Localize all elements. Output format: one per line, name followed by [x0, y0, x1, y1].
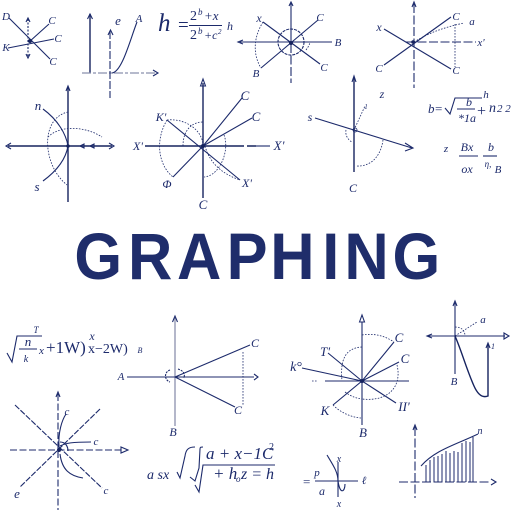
formula: root expression: n [25, 334, 31, 349]
title: GRAPHING [74, 219, 440, 293]
formula: root expression: x [88, 329, 95, 343]
chart: four-line axis top left: C [54, 33, 62, 45]
formula: h equals fraction [158, 7, 233, 43]
chart: dashed axes with dotted triangle top right: x' [476, 37, 485, 49]
chart: axis with n and s curve [6, 86, 114, 202]
formula: b equals root: = [435, 101, 442, 116]
formula: integral expression: o [236, 474, 241, 484]
chart: tilted axis with arrow: C [349, 181, 358, 195]
formula: root expression: x [38, 345, 44, 357]
chart: axis with dipping curve: a [480, 314, 486, 326]
chart: radial lines with arcs: C [199, 197, 208, 212]
chart: radial lines A B [290, 315, 410, 440]
formula: h equals fraction: h [227, 19, 233, 33]
formula: h equals fraction: 2 [190, 28, 197, 43]
chart: radial lines A B: K [320, 403, 331, 418]
chart: axis with n and s curve: s [34, 179, 40, 194]
formula: z with fractions [443, 140, 502, 176]
chart: axis with n and s curve: n [35, 98, 41, 113]
formula: h equals fraction: +x [204, 8, 219, 23]
formula: h equals fraction: = [178, 15, 189, 36]
formula: b equals root: *1a [458, 111, 476, 125]
formula: h equals fraction: h [158, 10, 170, 37]
chart: dashed axes with dotted triangle top right [375, 2, 485, 88]
formula: small fraction with crossing curve: p [313, 467, 320, 479]
formula: b equals root: n [489, 101, 496, 116]
chart: tilted axis with arrow: s [308, 110, 313, 124]
formula: root expression: k [24, 354, 29, 365]
formula: h equals fraction: 2 [218, 28, 222, 36]
chart: radial lines A B: B [359, 425, 367, 440]
chart: axis with dipping curve: 1 [491, 342, 495, 351]
formula: z with fractions: b [488, 140, 494, 154]
chart: area under curve bars [399, 425, 496, 498]
formula: root expression: B [138, 346, 143, 355]
chart: dashed axes with dotted triangle top right: C [452, 65, 460, 77]
chart: A B axis with wedge: A [117, 371, 125, 383]
chart: rising curve with axes [82, 13, 158, 98]
formula: root expression: +1W) [46, 338, 86, 357]
formula: b equals root [428, 89, 511, 125]
formula: b equals root: b [428, 101, 435, 116]
chart: radial lines with arcs: X' [241, 176, 252, 190]
chart: four-line axis top left: C [49, 56, 57, 68]
formula: h equals fraction: 2 [190, 9, 197, 24]
chart: four-line axis top left: C [48, 15, 56, 27]
chart: radial lines A B: T' [320, 344, 330, 359]
formula: z with fractions: η, [485, 159, 491, 169]
formula: small fraction with crossing curve: x [336, 454, 342, 465]
chart: axis with centre circle top middle: B [253, 68, 260, 80]
chart: dashed star with curves: c [104, 485, 109, 497]
chart: axis with dipping curve: B [451, 376, 458, 388]
chart: four-line axis top left: D [1, 11, 10, 23]
chart: axis with centre circle top middle [238, 2, 342, 83]
formula: small fraction with crossing curve: x [336, 499, 342, 510]
chart: radial lines A B: II' [397, 399, 410, 414]
formula: z with fractions: B [495, 164, 502, 176]
chart: A B axis with wedge [117, 316, 260, 439]
chart: dashed star with curves: e [14, 486, 20, 501]
chart: axis with centre circle top middle: C [320, 62, 328, 74]
formula: small fraction with crossing curve: = [303, 474, 310, 489]
chart: dashed axes with dotted triangle top right: a [469, 16, 475, 28]
formula: small fraction with crossing curve [303, 454, 367, 510]
formula: root expression: x−2W) [88, 342, 128, 357]
chart: dashed star with curves: c [65, 406, 70, 418]
formula: small fraction with crossing curve: ℓ [362, 475, 367, 487]
chart: radial lines with arcs: X' [273, 138, 285, 153]
chart: A B axis with wedge: C [234, 403, 243, 417]
chart: A B axis with wedge: B [169, 425, 177, 439]
chart: radial lines A B: C [401, 351, 410, 366]
chart: axis with dipping curve [427, 301, 509, 397]
formula: b equals root: 2 2 [497, 103, 511, 115]
chart: tilted axis with arrow [308, 76, 413, 195]
formula: integral expression: a + x−1C [206, 444, 274, 463]
formula: integral expression: z = h [240, 466, 274, 483]
chart: radial lines with arcs: K' [155, 110, 167, 124]
formula: integral expression: a sx [147, 468, 170, 483]
chart: radial lines A B: k° [290, 360, 302, 375]
chart: dashed axes with dotted triangle top right: C [452, 11, 460, 23]
chart: tilted axis with arrow: 1 [364, 103, 368, 111]
chart: radial lines with arcs [132, 79, 285, 212]
chart: dashed star with curves: c [94, 436, 99, 448]
chart: tilted axis with arrow: z [379, 87, 385, 101]
chart: radial lines with arcs: C [241, 88, 250, 103]
chart: rising curve with axes: e [115, 13, 121, 28]
chart: axis with centre circle top middle: B [335, 37, 342, 49]
formula: h equals fraction: b [198, 26, 203, 36]
formula: integral expression: 2 [269, 442, 274, 453]
formula: h equals fraction: +c [204, 28, 218, 42]
formula: b equals root: + [477, 103, 486, 120]
formula: root expression: T [33, 325, 39, 335]
formula: z with fractions: Bx [461, 140, 474, 154]
formula: z with fractions: z [443, 143, 449, 155]
formula: integral expression: + h [213, 464, 237, 483]
formula: z with fractions: ox [461, 162, 473, 176]
chart: radial lines with arcs: X' [132, 139, 143, 153]
chart: four-line axis top left [1, 11, 62, 68]
chart: area under curve bars: n [478, 426, 482, 437]
chart: dashed star with curves [10, 392, 128, 510]
formula: h equals fraction: b [198, 7, 203, 17]
formula: integral expression [147, 442, 275, 492]
chart: radial lines with arcs: C [252, 109, 261, 124]
chart: axis with centre circle top middle: x [255, 11, 262, 25]
chart: radial lines with arcs: Φ [162, 177, 172, 191]
chart: rising curve with axes: A [135, 13, 143, 25]
formula: small fraction with crossing curve: a [319, 484, 325, 498]
chart: dashed axes with dotted triangle top right: x [375, 20, 382, 34]
chart: radial lines A B: C [395, 330, 404, 345]
chart: axis with centre circle top middle: C [316, 12, 324, 24]
chart: four-line axis top left: K [1, 42, 10, 54]
chart: dashed axes with dotted triangle top right: C [375, 63, 383, 75]
formula: b equals root: h [483, 89, 489, 101]
formula: b equals root: b [466, 95, 472, 109]
formula: root expression [7, 325, 143, 365]
chart: A B axis with wedge: C [251, 336, 260, 350]
